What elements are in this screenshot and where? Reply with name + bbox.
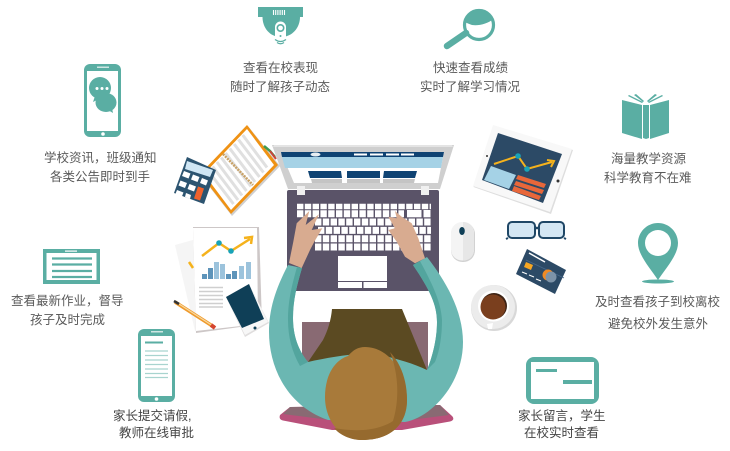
- text: phone caption: [44, 150, 157, 184]
- text: homework caption: 查看最新作业，督导: [11, 293, 124, 308]
- text: book caption: 科学教育不在难: [604, 170, 692, 185]
- text: phone caption: 各类公告即时到手: [50, 169, 150, 184]
- icon: location pin: [638, 223, 678, 284]
- seat cushion: [280, 405, 453, 430]
- text: magnifier caption: 实时了解学习情况: [420, 79, 521, 94]
- icon: phone with chat bubbles: [84, 64, 121, 137]
- text: magnifier caption: [420, 61, 521, 94]
- torso: [308, 309, 427, 370]
- hair: [325, 347, 407, 440]
- keyboard: [297, 206, 431, 247]
- calculator: [174, 157, 216, 204]
- text: phone caption: 学校资讯，班级通知: [44, 150, 157, 165]
- text: camera caption: 查看在校表现: [243, 60, 318, 75]
- icon: message card: [526, 357, 599, 404]
- tablet: [473, 125, 573, 214]
- trackpad: [338, 256, 387, 288]
- pencil: [174, 301, 215, 328]
- text: location caption: [595, 294, 721, 331]
- text: book caption: [604, 151, 692, 185]
- icon: phone with leave form: [138, 329, 175, 402]
- text: location caption: 及时查看孩子到校离校: [595, 294, 721, 309]
- icon: magnifier: [447, 10, 494, 46]
- text: location caption: 避免校外发生意外: [608, 316, 709, 331]
- chair back: [302, 322, 428, 372]
- phone on desk: [226, 284, 269, 337]
- laptop base: [287, 190, 439, 291]
- text: camera caption: [230, 60, 330, 94]
- glasses: [506, 222, 566, 239]
- coffee cup: [471, 285, 517, 331]
- mouse: [451, 222, 475, 262]
- text: message caption: 在校实时查看: [524, 425, 599, 440]
- text: leave caption: 教师在线审批: [119, 425, 194, 440]
- laptop screen: [272, 145, 454, 195]
- hands: [289, 211, 425, 268]
- arms and shoulders: [269, 257, 463, 422]
- text: leave caption: [113, 408, 194, 440]
- text: message caption: 家长留言，学生: [518, 408, 606, 423]
- notebook: [200, 125, 280, 216]
- text: leave caption: 家长提交请假,: [113, 408, 191, 423]
- icon: security camera: [258, 7, 303, 44]
- text: book caption: 海量教学资源: [611, 151, 687, 166]
- text: camera caption: 随时了解孩子动态: [230, 79, 330, 94]
- bank card: [516, 249, 566, 294]
- icon: homework document: [43, 249, 100, 284]
- text: homework caption: [11, 293, 124, 327]
- text: message caption: [518, 408, 606, 440]
- laptop: [272, 145, 454, 291]
- text: magnifier caption: 快速查看成绩: [433, 61, 509, 75]
- text: homework caption: 孩子及时完成: [30, 312, 105, 327]
- report papers: [175, 227, 262, 333]
- icon: open book: [622, 94, 669, 139]
